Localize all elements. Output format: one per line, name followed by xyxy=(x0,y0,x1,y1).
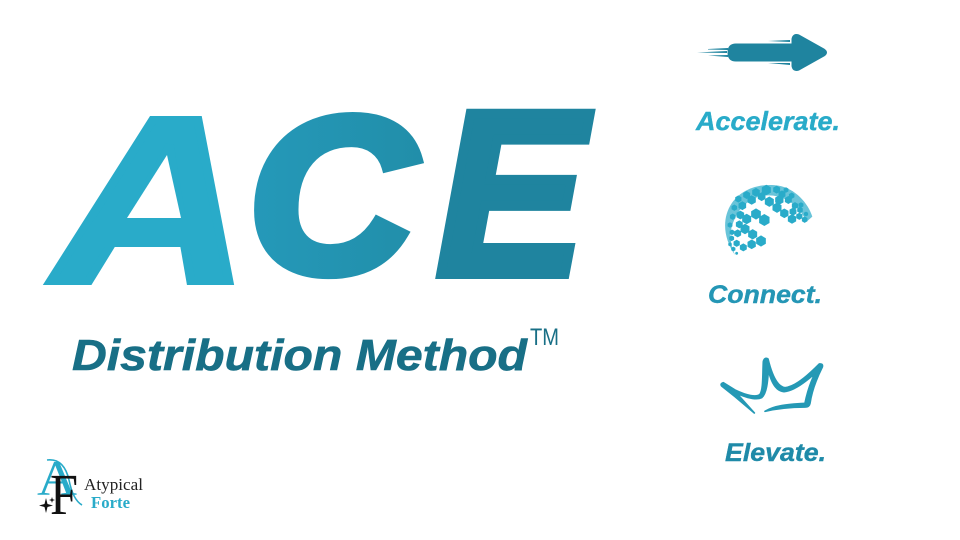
monogram F: F xyxy=(50,462,78,527)
letter C: C xyxy=(248,72,418,320)
letter E: E xyxy=(437,64,591,324)
wordmark Forte: Forte xyxy=(91,493,130,512)
subtitle: Distribution Method xyxy=(72,324,559,380)
monogram swoosh xyxy=(47,460,82,505)
label: Accelerate: Accelerate. xyxy=(695,106,840,136)
label: Connect: Connect. xyxy=(708,281,822,309)
wordmark Atypical: Atypical xyxy=(84,475,143,494)
trademark: TM xyxy=(530,324,559,351)
subtitle text: Distribution Method xyxy=(72,331,528,380)
monogram A: A xyxy=(37,450,77,506)
sparkles xyxy=(39,497,55,513)
label: Elevate: Elevate. xyxy=(725,439,826,467)
letter A: A xyxy=(50,69,248,331)
icon: crown xyxy=(721,358,823,413)
icon: hexagon globe xyxy=(725,185,812,255)
title: ACE xyxy=(50,64,591,331)
icon: arrow xyxy=(697,34,826,70)
logo: Atypical Forte xyxy=(37,450,143,527)
